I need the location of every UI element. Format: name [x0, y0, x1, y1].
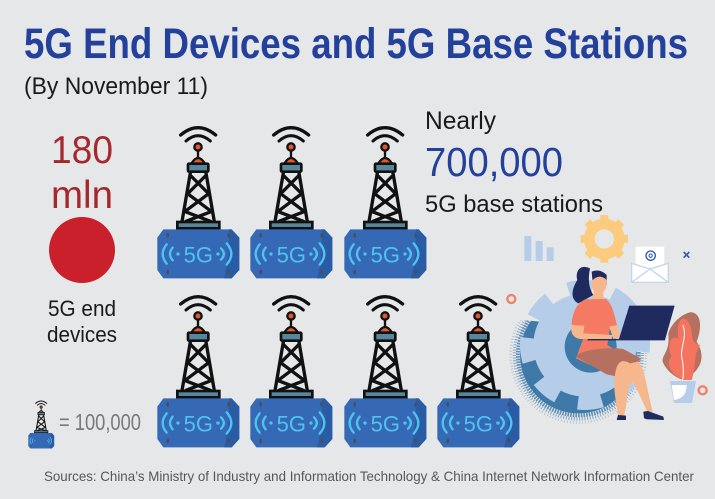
base stations callout [425, 107, 603, 218]
end devices label: 5G end [48, 296, 116, 321]
icon: cross [684, 252, 689, 258]
180 mln figure: 180 [51, 129, 113, 172]
woman [571, 267, 675, 420]
tower row 2 col 2 [250, 297, 332, 447]
tower row 2 col 1: 5G [184, 411, 213, 436]
icon: envelope [632, 247, 668, 282]
180 mln figure [51, 129, 113, 217]
base stations callout: 700,000 [425, 139, 563, 185]
base station tower grid [157, 128, 519, 447]
tower row 1 col 2 [250, 128, 332, 278]
icon: bar chart [524, 236, 554, 261]
tower row 2 col 1 [157, 297, 239, 447]
tower row 1 col 2: 5G [277, 242, 306, 267]
subtitle: (By November 11) [24, 73, 208, 100]
tower row 1 col 1 [157, 128, 239, 278]
end devices label [47, 296, 117, 347]
tower row 2 col 4: 5G [464, 411, 493, 436]
tower row 1 col 3: 5G [371, 242, 400, 267]
sources: Sources: China’s Ministry of Industry and Information Technology & China Internet Network Information Center [44, 468, 694, 484]
tower row 1 col 1: 5G [184, 242, 213, 267]
illustration: woman with laptop [503, 215, 707, 423]
icon: small gear [581, 215, 628, 263]
tower row 2 col 3: 5G [371, 411, 400, 436]
base stations callout: Nearly [425, 107, 496, 135]
legend: one tower equals 100,000: = 100,000 [59, 409, 141, 435]
180 mln figure: mln [51, 174, 113, 217]
tower row 1 col 3 [344, 128, 426, 278]
tower row 2 col 4 [437, 297, 519, 447]
base stations callout: 5G base stations [425, 191, 603, 218]
icon: ring left [507, 295, 515, 303]
end devices label: devices [47, 322, 117, 347]
icon: ring right [699, 386, 707, 394]
legend: one tower equals 100,000 [28, 401, 141, 448]
red circle: end devices [49, 217, 115, 283]
tower row 2 col 2: 5G [277, 411, 306, 436]
large gear with speckled edge [503, 272, 663, 423]
tower row 2 col 3 [344, 297, 426, 447]
plant and pot [663, 312, 702, 403]
